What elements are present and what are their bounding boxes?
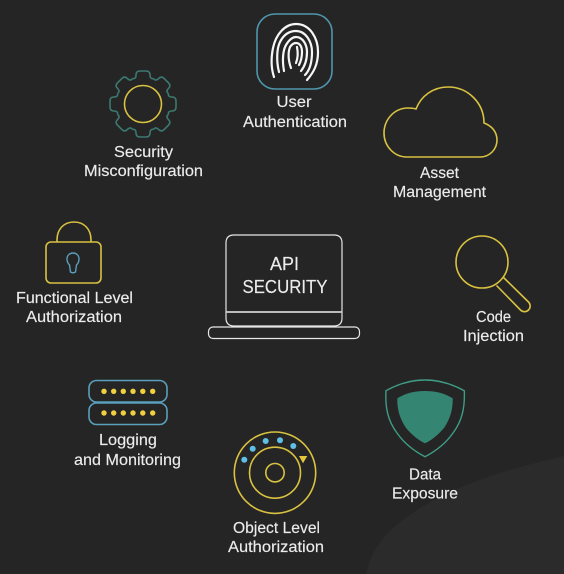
title: API Security: [242, 253, 328, 297]
label: Logging and Monitoring: and Monitoring: [74, 452, 181, 469]
panel: data exposure: [386, 380, 464, 502]
label: Asset Management: Asset: [420, 165, 460, 182]
panel: user authentication: [243, 14, 347, 131]
icon: shield: [386, 380, 464, 457]
panel: API security laptop: [208, 235, 360, 338]
label: Object Level Authorization: Authorization: [228, 539, 324, 556]
icon: gear: [110, 71, 176, 137]
label: Functional Level Authorization: Authorization: [26, 309, 122, 326]
label: Data Exposure: [392, 466, 458, 502]
label: Functional Level Authorization: Functional Level: [16, 290, 133, 307]
icon: magnifying glass: [456, 236, 530, 312]
label: Data Exposure: Exposure: [392, 486, 458, 502]
label: Code Injection: Code: [476, 309, 511, 326]
title: API Security: SECURITY: [242, 276, 328, 297]
icon: laptop: [208, 235, 360, 338]
label: Asset Management: Management: [393, 184, 487, 201]
icon: cloud: [384, 87, 497, 157]
icon: fingerprint: [257, 14, 332, 89]
label: Logging and Monitoring: [74, 432, 181, 469]
label: User Authentication: [243, 94, 347, 131]
label: Code Injection: Injection: [463, 328, 524, 345]
icon: dial: [234, 432, 316, 513]
title: API Security: API: [270, 253, 299, 274]
icon: padlock: [46, 222, 101, 283]
label: Object Level Authorization: [228, 520, 324, 556]
label: Logging and Monitoring: Logging: [99, 432, 157, 449]
panel: logging and monitoring: [74, 380, 181, 469]
label: Security Misconfiguration: Misconfiguration: [84, 163, 203, 180]
label: Security Misconfiguration: [84, 144, 203, 180]
panel: object level authorization: [228, 432, 324, 556]
label: User Authentication: User: [276, 94, 312, 111]
panel: functional level authorization: [16, 222, 133, 326]
label: Security Misconfiguration: Security: [114, 144, 173, 161]
label: Object Level Authorization: Object Level: [233, 520, 320, 537]
label: Code Injection: [463, 309, 524, 345]
label: Functional Level Authorization: [16, 290, 133, 326]
label: Asset Management: [393, 165, 487, 201]
panel: security misconfiguration: [84, 71, 203, 180]
icon: server racks: [89, 380, 167, 424]
label: Data Exposure: Data: [409, 466, 441, 484]
panel: asset management: [384, 87, 497, 201]
label: User Authentication: Authentication: [243, 114, 347, 131]
panel: code injection: [456, 236, 530, 345]
